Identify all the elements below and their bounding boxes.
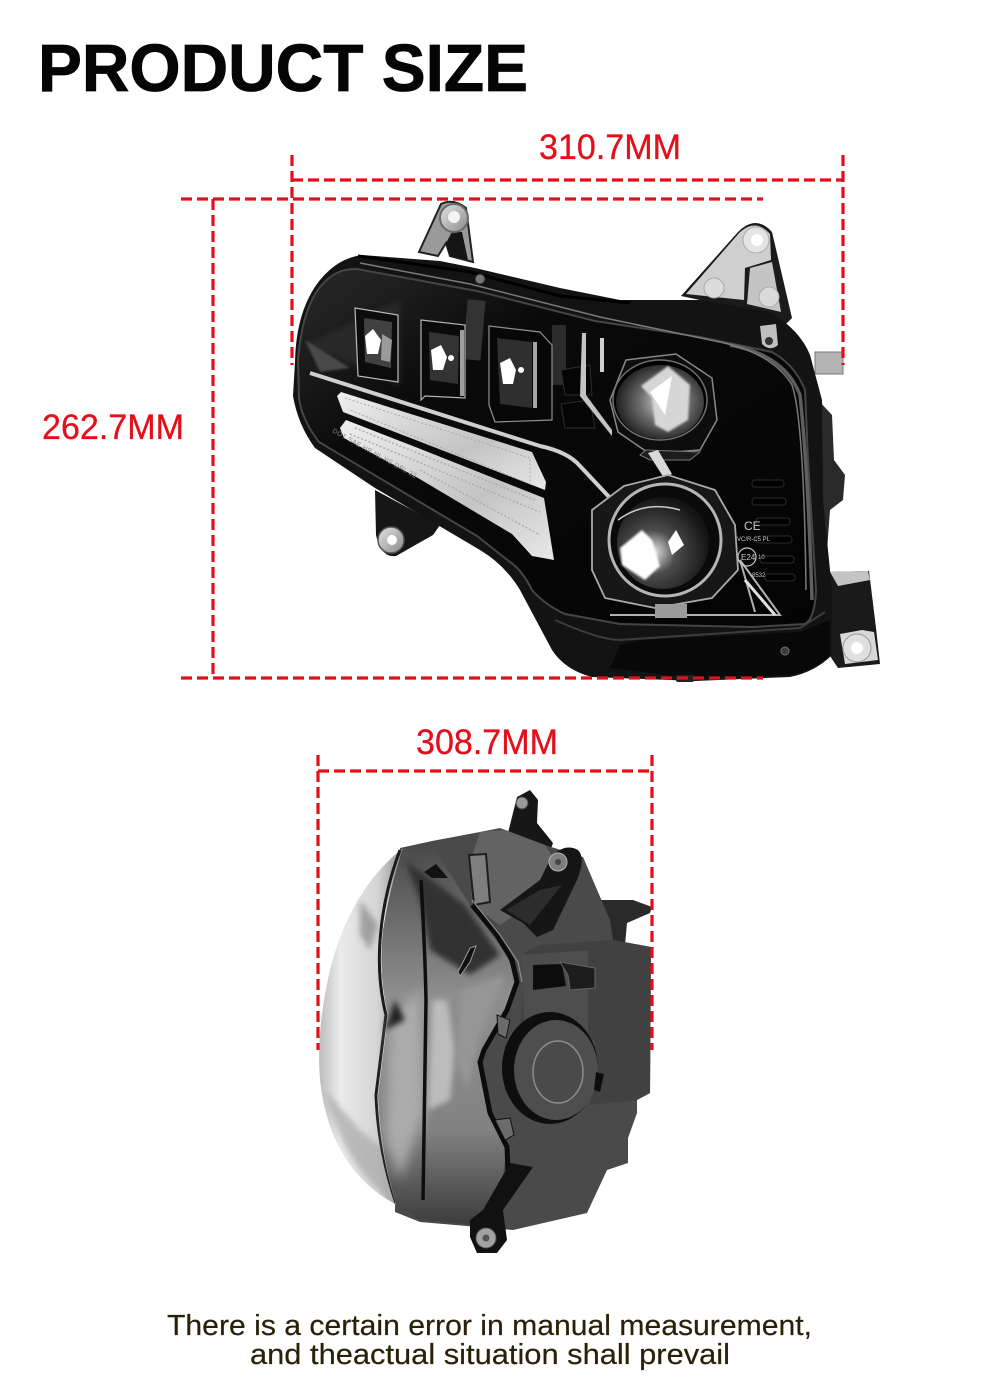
upper bracket — [500, 848, 582, 937]
certification markings: E24 — [741, 553, 756, 562]
projector module 2 — [421, 320, 465, 400]
metallic shell — [378, 842, 517, 1225]
dimension label: 308.7MM — [416, 723, 558, 762]
projector module 3 — [489, 326, 552, 422]
footnote — [167, 1310, 812, 1371]
bottom-right bracket — [826, 571, 880, 668]
headlight side view — [319, 790, 652, 1253]
side vent slot — [458, 946, 476, 976]
lens shaded edge — [325, 1090, 393, 1200]
dimension: depth 308.7MM — [318, 723, 652, 1050]
screw on top tab — [516, 797, 528, 809]
footnote: and theactual situation shall prevail — [250, 1339, 730, 1371]
top clip on shell — [424, 864, 448, 878]
projector module 1 — [355, 308, 398, 382]
rear housing — [395, 828, 651, 1230]
right grey frame band — [730, 345, 812, 600]
silver trim line — [310, 373, 611, 499]
certification markings: VC/R-C5 PL — [737, 537, 771, 543]
small lens markings: DOT SAE HR HL HS DRL 22 — [331, 428, 418, 480]
dimension lines — [292, 155, 843, 365]
rear housing bulge — [815, 400, 845, 565]
lens dome — [319, 848, 403, 1205]
lower bracket — [470, 1163, 533, 1253]
centre connector blocks — [561, 365, 595, 428]
projector modules — [355, 308, 552, 422]
certification markings: CE — [744, 519, 761, 533]
top-left mounting bracket — [419, 202, 473, 262]
right side stub — [815, 352, 843, 374]
upper neck — [470, 830, 552, 925]
certification markings — [737, 519, 771, 579]
lens seal line — [376, 850, 400, 1203]
shell dark crease — [421, 880, 426, 1200]
dimension lines — [318, 755, 652, 1050]
title: PRODUCT SIZE — [38, 31, 528, 106]
grey body panel — [520, 940, 651, 1105]
top mounting tab — [505, 790, 553, 880]
silver tab near top right — [760, 324, 778, 348]
dimension lines — [181, 199, 763, 678]
outer housing — [293, 255, 832, 681]
certification markings: 10 — [758, 555, 765, 561]
housing screw — [781, 647, 789, 655]
lower clips — [495, 1015, 514, 1140]
daytime running strip upper — [337, 392, 546, 490]
lower projector lens — [592, 475, 780, 618]
top-right mounting bracket — [681, 223, 792, 324]
bottom-left bracket — [375, 490, 440, 556]
cooling vent slats — [752, 480, 795, 581]
dimension: width 310.7MM — [292, 128, 843, 365]
dimension: height 262.7MM — [42, 199, 763, 678]
lens glass — [298, 269, 816, 627]
upper projector lens — [610, 354, 717, 460]
shell highlight — [385, 990, 425, 1180]
headlight front view — [293, 202, 880, 682]
latch clip — [533, 962, 595, 990]
grey glass reflection — [305, 300, 400, 385]
bottom housing highlight — [610, 620, 830, 678]
bottom edge clip — [676, 675, 694, 682]
top frame screw — [475, 274, 485, 284]
light connector between lenses — [648, 450, 672, 478]
dimension label: 310.7MM — [539, 128, 681, 167]
certification markings: 8532 — [752, 573, 766, 579]
trim lines along top edge — [360, 263, 806, 590]
footnote: There is a certain error in manual measurement, — [167, 1310, 812, 1342]
round cap — [502, 1012, 604, 1124]
rear connector — [593, 900, 652, 945]
daytime running strip lower — [340, 420, 554, 560]
seal seam — [472, 905, 517, 1172]
dimension label: 262.7MM — [42, 408, 184, 447]
